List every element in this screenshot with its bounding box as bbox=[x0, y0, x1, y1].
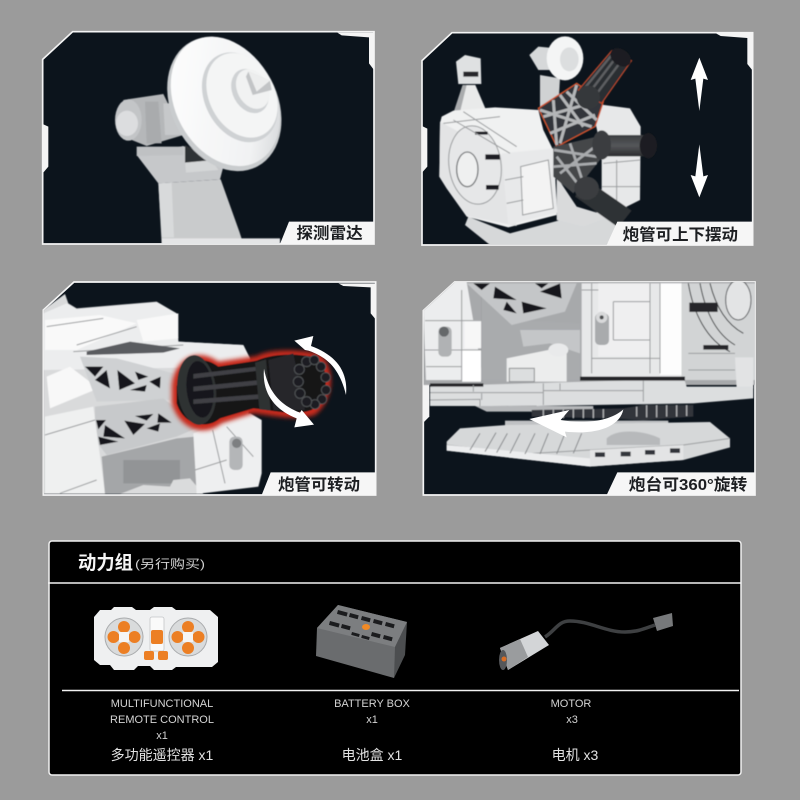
caption: remote control bbox=[110, 698, 214, 763]
truss lower bbox=[95, 398, 200, 455]
small radar bbox=[540, 75, 560, 108]
arrow: rotation lower bbox=[264, 369, 314, 427]
turret base close-up bbox=[423, 280, 755, 467]
heading note: (另行购买) bbox=[135, 556, 205, 571]
barrel: raised bbox=[577, 44, 635, 109]
red glow bbox=[172, 350, 331, 430]
label: 探测雷达 bbox=[280, 222, 374, 244]
icon: battery box bbox=[316, 605, 407, 678]
gun flange bbox=[176, 354, 216, 426]
lower left armour bbox=[45, 407, 105, 493]
sensor mast bbox=[456, 55, 481, 84]
radar pedestal bbox=[158, 179, 243, 244]
armour backdrop bbox=[43, 294, 250, 494]
caption: remote control: REMOTE CONTROL bbox=[110, 714, 214, 726]
panel: turret rotates 360 bbox=[423, 280, 755, 495]
label: 炮管可转动: 炮管可转动 bbox=[278, 475, 360, 494]
arrow: up bbox=[691, 58, 708, 111]
caption: motor: 电机 x3 bbox=[552, 747, 599, 763]
divider dots bbox=[48, 582, 741, 584]
right armour block bbox=[592, 103, 641, 212]
caption: remote control: MULTIFUNCTIONAL bbox=[111, 698, 213, 710]
turret model bbox=[439, 36, 657, 245]
heading: 动力组 bbox=[78, 552, 133, 574]
right drum bbox=[682, 283, 755, 380]
box bbox=[507, 350, 567, 382]
gun barrels bbox=[193, 366, 263, 404]
red outline truss bbox=[538, 83, 603, 147]
arrow: rotation upper bbox=[294, 336, 346, 395]
arrow: turret rotation bbox=[529, 409, 623, 437]
caption: remote control: 多功能遥控器 x1 bbox=[111, 747, 214, 763]
upper dark interior bbox=[423, 282, 755, 385]
truss bbox=[467, 283, 577, 325]
left door block bbox=[423, 282, 483, 380]
interior bbox=[482, 320, 484, 380]
icon: frame notches bbox=[422, 33, 753, 173]
truss upper bbox=[80, 357, 173, 402]
gear ring bbox=[532, 405, 693, 420]
main armour block bbox=[439, 107, 557, 227]
caption: battery box: 电池盒 x1 bbox=[342, 747, 403, 763]
panel: power group bbox=[48, 541, 741, 775]
radar model bbox=[114, 36, 282, 244]
barrel: level bbox=[592, 130, 657, 160]
panel: barrels swing up and down bbox=[422, 33, 753, 245]
label: 炮管可转动 bbox=[262, 472, 376, 495]
caption: battery box: x1 bbox=[366, 714, 378, 726]
gun close-up bbox=[43, 294, 331, 494]
label: 探测雷达: 探测雷达 bbox=[296, 225, 363, 243]
label: 炮管可上下摆动 bbox=[607, 222, 753, 245]
arrow: down bbox=[691, 144, 708, 197]
caption: battery box bbox=[334, 698, 411, 763]
muzzle rings bbox=[293, 355, 331, 409]
panel: rotating barrel bbox=[43, 282, 376, 495]
platform deck bbox=[430, 377, 753, 406]
caption: battery box: BATTERY BOX bbox=[334, 698, 411, 710]
icon: frame notches bbox=[43, 33, 374, 173]
caption: motor bbox=[551, 698, 599, 763]
interior bbox=[102, 437, 197, 494]
icon: frame notches bbox=[338, 283, 376, 319]
label: 炮台可360°旋转 bbox=[607, 472, 755, 495]
caption: motor: x3 bbox=[566, 714, 578, 726]
label: 炮管可上下摆动: 炮管可上下摆动 bbox=[623, 225, 738, 244]
barrel: lowered bbox=[574, 177, 632, 227]
centre door block bbox=[582, 283, 682, 377]
door block bbox=[193, 413, 262, 494]
icon: motor with cable bbox=[499, 613, 673, 670]
base bbox=[465, 210, 623, 245]
icon: remote control bbox=[94, 607, 218, 670]
armour top bbox=[43, 302, 250, 370]
caption: remote control: x1 bbox=[156, 730, 168, 742]
icon: frame notch bbox=[423, 377, 429, 423]
caption: motor: MOTOR bbox=[551, 698, 591, 710]
lower base bbox=[505, 421, 668, 427]
label: 炮台可360°旋转: 炮台可360°旋转 bbox=[629, 475, 747, 494]
divider bbox=[62, 690, 739, 692]
panel: detection radar bbox=[43, 17, 374, 244]
